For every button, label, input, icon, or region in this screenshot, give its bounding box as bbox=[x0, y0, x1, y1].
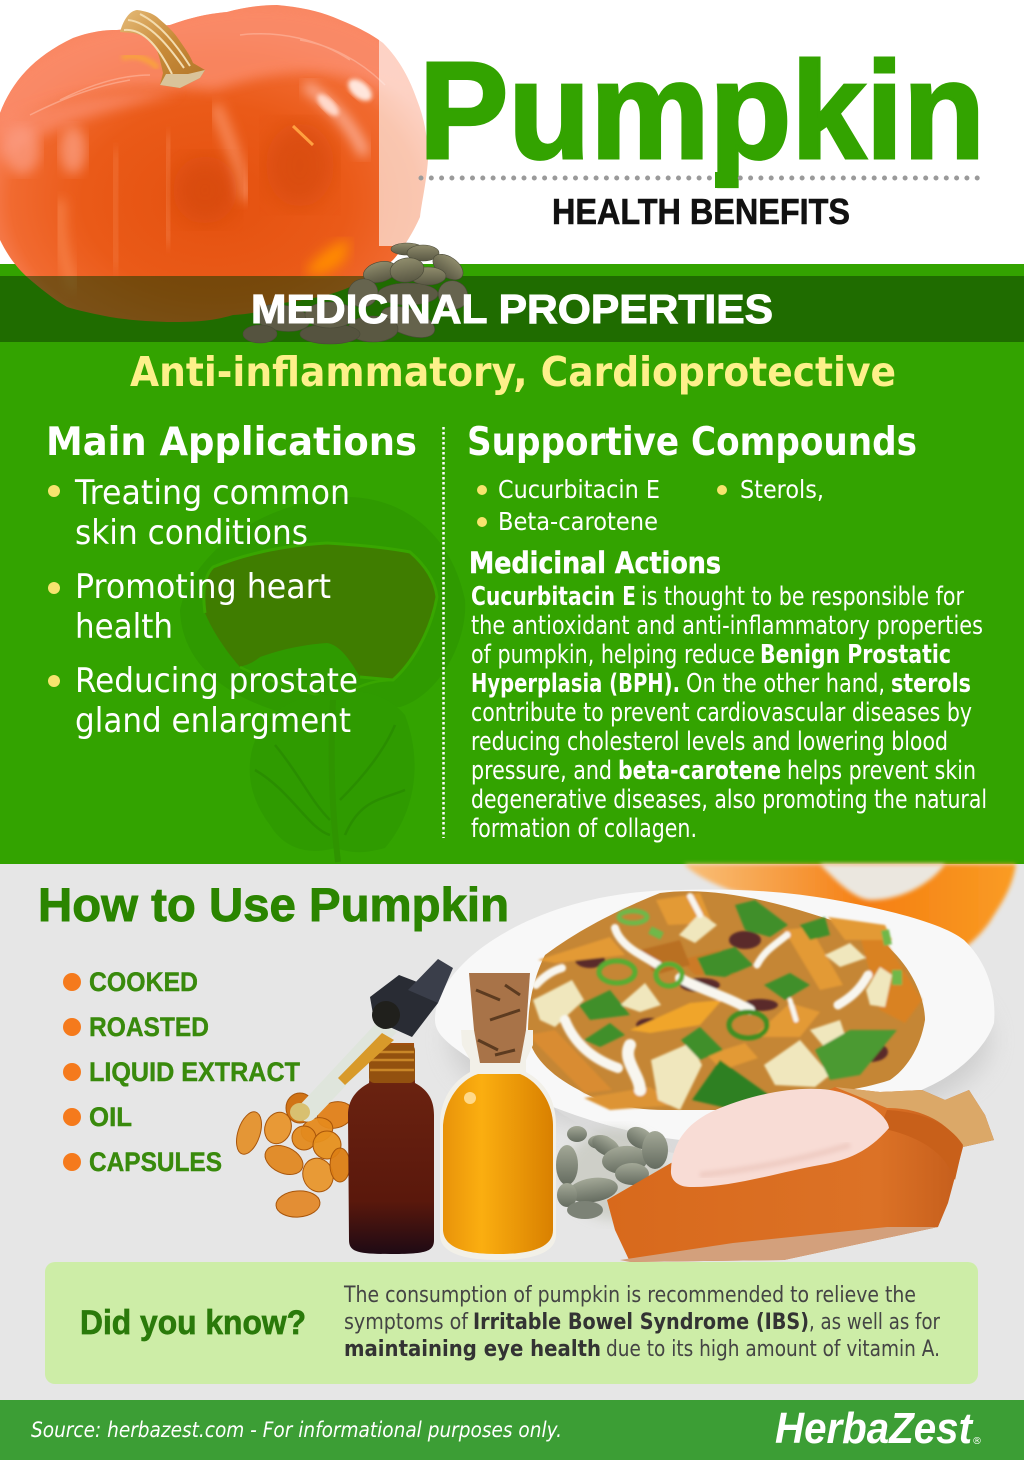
panel: did you know bbox=[45, 1262, 978, 1384]
bullet list: applications: Treating common bbox=[74, 473, 350, 513]
text block: medicinal actions: sterols bbox=[891, 669, 971, 699]
illustration: capsules bbox=[232, 1093, 356, 1219]
illustration: pumpkin pie bbox=[607, 1087, 994, 1262]
text block: medicinal actions: beta-carotene bbox=[618, 756, 781, 786]
text block: medicinal actions: Hyperplasia (BPH). bbox=[471, 669, 680, 699]
text block: medicinal actions: Cucurbitacin E bbox=[471, 582, 636, 612]
heading: how to use: How to Use Pumpkin bbox=[38, 878, 509, 931]
list: uses: LIQUID EXTRACT bbox=[89, 1057, 300, 1087]
illustration: oil bottle bbox=[440, 973, 556, 1260]
panel: medicinal properties green background bbox=[0, 264, 1024, 864]
text block: medicinal actions bbox=[471, 582, 987, 844]
illustration: pumpkin seeds bbox=[243, 243, 473, 344]
footer bbox=[0, 1400, 1024, 1460]
illustration: dropper bbox=[290, 959, 453, 1122]
registered mark: ® bbox=[972, 1436, 982, 1447]
list: uses: CAPSULES bbox=[89, 1147, 222, 1177]
bullet list: compounds: Cucurbitacin E bbox=[498, 475, 660, 504]
source note: Source: herbazest.com - For informational purposes only. bbox=[31, 1418, 562, 1442]
bullet list: applications: gland enlargment bbox=[75, 701, 351, 741]
panel: supportive compounds bbox=[467, 420, 987, 844]
panel: how to use background bbox=[0, 864, 1024, 1400]
text block: did you know: maintaining eye health bbox=[344, 1336, 601, 1362]
illustration: pumpkin bbox=[0, 5, 428, 322]
illustration: seeds under plate bbox=[556, 1122, 671, 1220]
dotted divider bbox=[421, 176, 982, 180]
title descender over divider bbox=[715, 172, 737, 188]
heading: main applications: Main Applications bbox=[46, 420, 417, 465]
text block: medicinal actions: On the other hand, bbox=[686, 669, 885, 699]
pumpkin faded right edge overlay bbox=[379, 40, 439, 246]
heading: supportive compounds: Supportive Compounds bbox=[467, 420, 917, 465]
title: Pumpkin bbox=[419, 34, 985, 188]
bullet list: compounds: Sterols, bbox=[740, 475, 824, 504]
pumpkin stem bbox=[120, 10, 205, 88]
bullet list: applications bbox=[48, 473, 358, 741]
properties line: Anti-inflammatory, Cardioprotective bbox=[130, 348, 896, 396]
text block: did you know: symptoms of bbox=[344, 1309, 469, 1335]
list: uses: OIL bbox=[89, 1102, 132, 1132]
bullet list: compounds bbox=[477, 475, 824, 536]
logo: HerbaZest bbox=[775, 1404, 974, 1453]
text block: medicinal actions: formation of collagen. bbox=[471, 814, 697, 844]
banner heading: MEDICINAL PROPERTIES bbox=[251, 286, 773, 332]
heading: did you know: Did you know? bbox=[80, 1304, 306, 1342]
illustration: pumpkin slice bbox=[684, 864, 1016, 952]
list: uses: ROASTED bbox=[89, 1012, 209, 1042]
text block: medicinal actions: of pumpkin, helping reduce bbox=[471, 640, 755, 670]
salad food bbox=[528, 891, 925, 1110]
column divider bbox=[442, 427, 445, 838]
bullet list: applications: Promoting heart bbox=[75, 567, 331, 607]
banner: dark band bbox=[0, 276, 1024, 342]
illustration: prostate watermark bbox=[180, 497, 465, 862]
text block: did you know: The consumption of pumpkin is recommended to relieve the bbox=[343, 1282, 916, 1308]
text block: medicinal actions: helps prevent skin bbox=[787, 756, 976, 786]
text block: did you know: due to its high amount of vitamin A. bbox=[606, 1336, 940, 1362]
text block: did you know bbox=[343, 1282, 941, 1362]
bullet list: compounds: Beta-carotene bbox=[498, 507, 658, 536]
list: uses: COOKED bbox=[89, 967, 198, 997]
panel: main applications bbox=[46, 420, 417, 741]
text block: did you know: , as well as for bbox=[809, 1309, 941, 1335]
text block: medicinal actions: Benign Prostatic bbox=[760, 640, 951, 670]
list: uses bbox=[63, 967, 300, 1177]
text block: did you know: Irritable Bowel Syndrome (IBS) bbox=[473, 1309, 809, 1335]
bullet list: applications: health bbox=[75, 607, 173, 647]
heading: medicinal actions: Medicinal Actions bbox=[469, 546, 721, 580]
whipped cream bbox=[671, 1089, 889, 1187]
text block: medicinal actions: pressure, and bbox=[471, 756, 612, 786]
bullet list: applications: skin conditions bbox=[75, 513, 308, 553]
illustration: salad plate bbox=[435, 889, 994, 1155]
illustration: amber dropper bottle bbox=[348, 1043, 434, 1254]
bullet list: applications: Reducing prostate bbox=[75, 661, 358, 701]
subtitle: HEALTH BENEFITS bbox=[552, 191, 850, 232]
